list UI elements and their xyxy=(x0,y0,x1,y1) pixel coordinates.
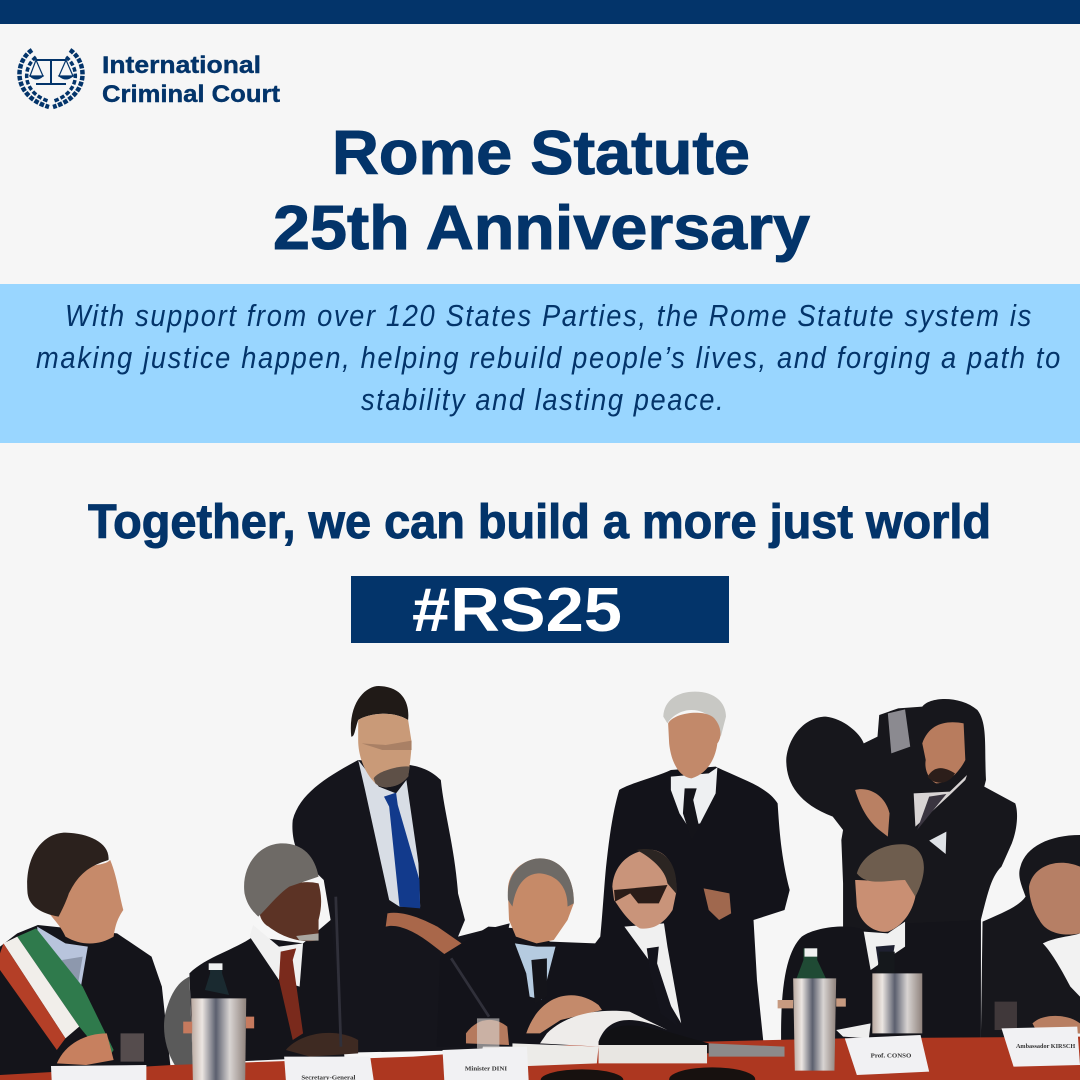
logo wordmark: International xyxy=(102,52,261,79)
logo wordmark: Criminal Court xyxy=(102,81,280,108)
top bar xyxy=(0,0,1080,24)
man seated: Secretary-General xyxy=(164,843,489,1067)
name placards: Minister DINI xyxy=(465,1066,507,1073)
heading: call to action: Together, we can build a more just world xyxy=(88,496,991,549)
cameraman xyxy=(786,699,1017,1043)
woman at right xyxy=(981,835,1080,1043)
title xyxy=(273,119,811,263)
man with glasses: Prof. Conso xyxy=(612,849,681,1027)
icon: laurel and scales xyxy=(19,50,83,107)
book xyxy=(512,1011,785,1067)
man signing: Minister Dini xyxy=(466,858,602,1045)
hashtag box xyxy=(351,576,729,645)
photo: signing of the Rome Statute xyxy=(0,686,1080,1080)
name placards: Prof. CONSO xyxy=(871,1052,911,1059)
water jugs right xyxy=(778,948,1017,1071)
man seated: Ambassador Kirsch xyxy=(781,844,981,1043)
mission statement text: stability and lasting peace. xyxy=(361,383,724,417)
title: Rome Statute xyxy=(332,119,750,188)
logo: International Criminal Court xyxy=(19,50,280,108)
red table xyxy=(0,1037,1080,1080)
mission statement text: With support from over 120 States Parties, the Rome Statute system is xyxy=(65,299,1031,333)
audience heads in foreground xyxy=(541,1067,755,1080)
name placards: Ambassador KIRSCH xyxy=(1016,1044,1075,1050)
logo wordmark xyxy=(102,52,280,108)
standing man with blue tie xyxy=(292,686,510,1053)
water jug left xyxy=(183,963,499,1080)
panel: mission statement band xyxy=(0,284,1080,443)
title: 25th Anniversary xyxy=(273,194,811,263)
name placards xyxy=(51,1027,1080,1080)
man with sash xyxy=(0,833,170,1077)
standing man with white hair xyxy=(437,692,790,1047)
hashtag box: #RS25 xyxy=(412,576,622,645)
mission statement text: making justice happen, helping rebuild people’s lives, and forging a path to xyxy=(36,341,1060,375)
mission statement text xyxy=(36,299,1060,417)
